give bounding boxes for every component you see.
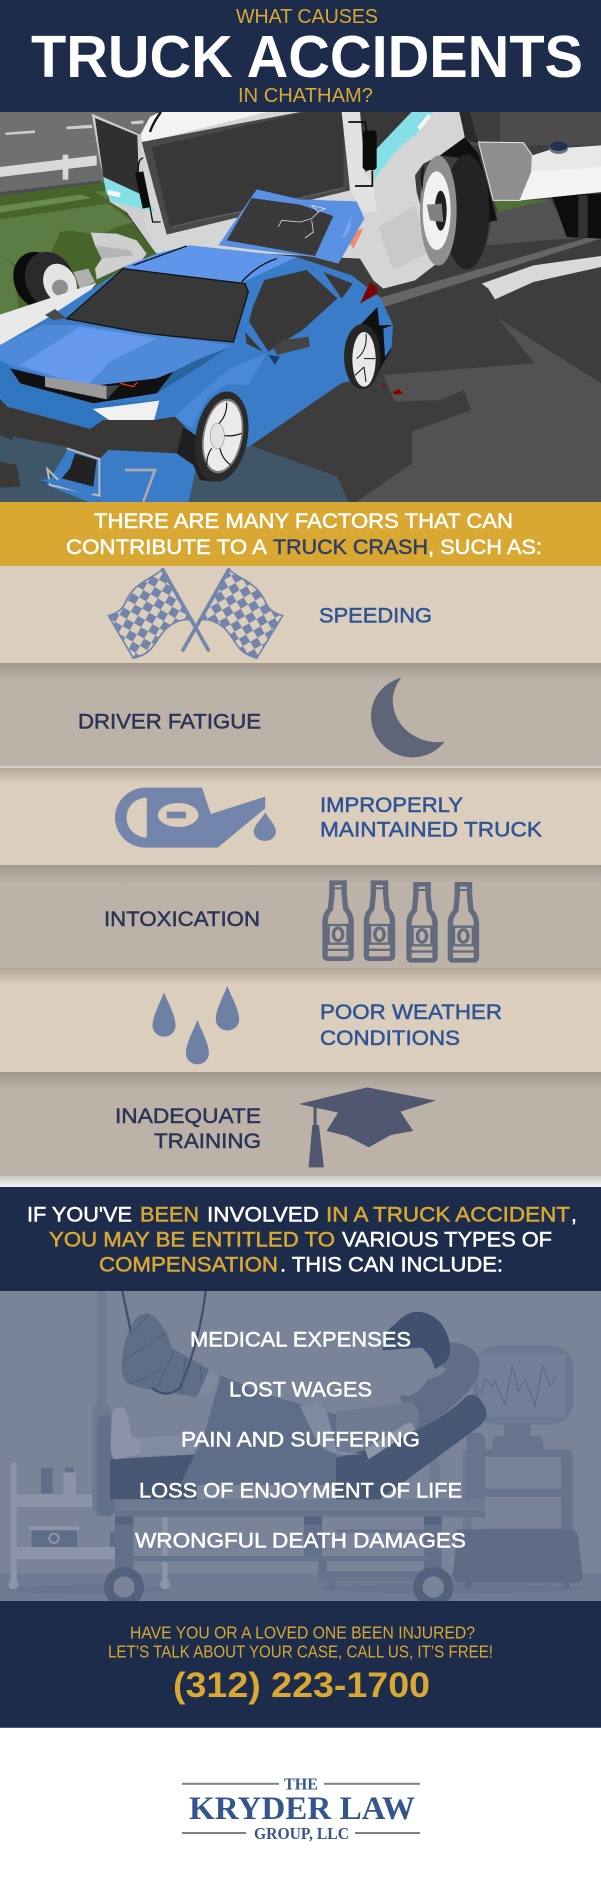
- far road and trailer: [377, 112, 601, 309]
- call to action: [0, 1601, 601, 1728]
- logo: The Kryder Law Group, LLC: [182, 1774, 420, 1843]
- flying car panel with cracked glass: [218, 189, 364, 264]
- factor: poor weather conditions: CONDITIONS: [320, 1027, 460, 1050]
- icon: graduation cap: [299, 1087, 436, 1167]
- factor: improperly maintained truck: [0, 766, 601, 865]
- factor: inadequate training: TRAINING: [154, 1130, 261, 1153]
- compensation heading: IN A TRUCK ACCIDENT: [326, 1204, 570, 1227]
- list of compensation: MEDICAL EXPENSES: [190, 1329, 411, 1352]
- factor: improperly maintained truck: IMPROPERLY: [320, 794, 463, 817]
- factors banner: THERE ARE MANY FACTORS THAT CAN: [94, 509, 513, 533]
- list of compensation: [135, 1329, 466, 1553]
- illustration: truck and car crash: [0, 112, 601, 503]
- call to action: HAVE YOU OR A LOVED ONE BEEN INJURED?: [130, 1623, 475, 1643]
- overturned wheel and debris: [0, 233, 147, 345]
- compensation heading: COMPENSATION: [99, 1254, 278, 1277]
- factor: driver fatigue: DRIVER FATIGUE: [78, 711, 261, 734]
- open truck door: [92, 114, 161, 254]
- panel: compensation types: [0, 1291, 601, 1602]
- compensation heading: [0, 1187, 601, 1291]
- factor: poor weather conditions: POOR WEATHER: [320, 1001, 502, 1024]
- car hood: [0, 309, 310, 503]
- list of compensation: PAIN AND SUFFERING: [181, 1429, 420, 1452]
- title: TRUCK ACCIDENTS: [31, 24, 583, 90]
- list of compensation: WRONGFUL DEATH DAMAGES: [135, 1530, 466, 1553]
- list of compensation: LOSS OF ENJOYMENT OF LIFE: [139, 1479, 462, 1502]
- truck cab: [127, 112, 497, 289]
- header: [0, 0, 601, 112]
- icon: four bottles: [325, 883, 476, 960]
- grass: [0, 183, 157, 319]
- factor: inadequate training: INADEQUATE: [115, 1105, 261, 1128]
- factor: speeding: [0, 566, 601, 663]
- factors banner: , SUCH AS:: [428, 535, 542, 559]
- blue car: [0, 245, 403, 503]
- factor: inadequate training: [0, 1072, 601, 1176]
- icon: rain drops: [153, 986, 239, 1064]
- icon: crescent moon: [371, 677, 445, 757]
- factors banner: TRUCK CRASH: [273, 535, 428, 559]
- compensation heading: . THIS CAN INCLUDE:: [280, 1254, 503, 1277]
- icon: oil can: [115, 788, 276, 848]
- factor: intoxication: [0, 865, 601, 968]
- compensation heading: ,: [571, 1204, 577, 1227]
- call to action: LET’S TALK ABOUT YOUR CASE, CALL US, IT’S FREE!: [108, 1642, 493, 1662]
- compensation heading: IF YOU'VE: [27, 1204, 132, 1227]
- compensation heading: VARIOUS TYPES OF: [342, 1229, 552, 1252]
- logo: The Kryder Law Group, LLC: GROUP, LLC: [254, 1824, 349, 1843]
- compensation heading: INVOLVED: [207, 1204, 319, 1227]
- illustration: hospital patient in traction: [0, 1291, 601, 1602]
- list of compensation: LOST WAGES: [229, 1379, 372, 1402]
- factors banner: [0, 502, 601, 566]
- factor: speeding: SPEEDING: [319, 605, 432, 628]
- patient: [111, 1291, 487, 1499]
- factors banner: CONTRIBUTE TO A: [66, 535, 268, 559]
- compensation heading: BEEN: [140, 1204, 199, 1227]
- monitor and cart: [453, 1345, 583, 1588]
- header location: IN CHATHAM?: [238, 85, 373, 107]
- logo: The Kryder Law Group, LLC: THE: [284, 1774, 318, 1794]
- factor: intoxication: INTOXICATION: [104, 908, 260, 931]
- rear wheel of car: [344, 307, 393, 389]
- foreground road shadows: [0, 318, 601, 502]
- road markings and guard rail: [0, 120, 143, 197]
- phone number: (312) 223-1700: [173, 1666, 430, 1705]
- factor: driver fatigue: [0, 663, 601, 767]
- factor: poor weather conditions: [0, 968, 601, 1072]
- compensation heading: YOU MAY BE ENTITLED TO: [49, 1229, 335, 1252]
- side table: [8, 1463, 170, 1589]
- factor: improperly maintained truck: MAINTAINED TRUCK: [320, 819, 542, 842]
- header kicker: WHAT CAUSES: [236, 6, 378, 28]
- icon: crossed checkered flags: [108, 570, 283, 658]
- logo: The Kryder Law Group, LLC: KRYDER LAW: [189, 1791, 415, 1827]
- hospital bed: [92, 1403, 485, 1602]
